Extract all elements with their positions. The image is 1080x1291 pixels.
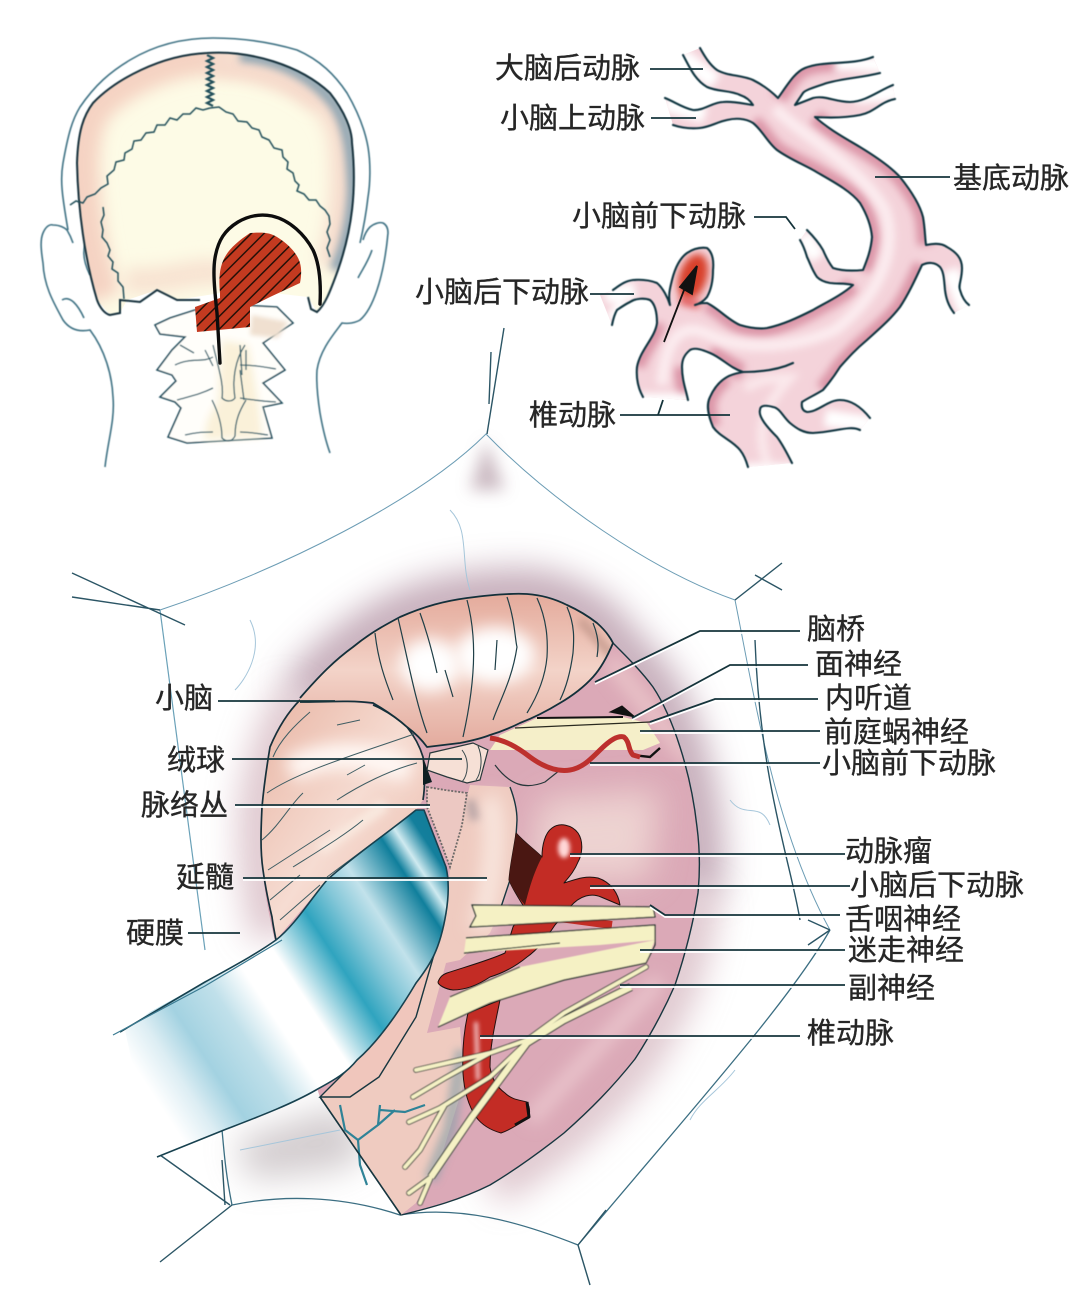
artery outline xyxy=(612,48,969,467)
choroid plexus xyxy=(427,787,467,867)
incision arc xyxy=(214,215,320,363)
artery labels: 大脑后动脉 xyxy=(495,52,640,85)
surgical field labels: left: 小脑 xyxy=(155,682,213,715)
surgical field labels: right: 内听道 xyxy=(825,682,912,715)
anterior inferior cerebellar artery xyxy=(490,737,640,770)
internal acoustic canal and nerve xyxy=(490,706,660,757)
surgical field labels: right: 椎动脉 xyxy=(807,1017,894,1050)
brainstem medulla xyxy=(320,785,517,1215)
artery labels: 椎动脉 xyxy=(529,399,616,432)
surgical field labels: right: 舌咽神经 xyxy=(845,903,961,936)
surgical field labels: right: 小脑后下动脉 xyxy=(850,869,1024,902)
flocculus xyxy=(423,743,488,785)
artery body xyxy=(590,40,980,475)
surgical field xyxy=(72,328,830,1285)
leader lines for surgical field xyxy=(188,631,850,1038)
surgical field labels: right: 副神经 xyxy=(848,972,935,1005)
head outline and ears xyxy=(41,38,388,467)
surgical field labels: right xyxy=(807,613,1024,1050)
blue dural retractor xyxy=(113,810,448,1157)
surgical field labels: right: 小脑前下动脉 xyxy=(822,747,996,780)
artery labels xyxy=(415,52,1069,432)
cranial nerves xyxy=(405,905,655,1203)
label lines for artery diagram xyxy=(590,69,950,415)
retraction sutures xyxy=(72,328,830,1285)
cranial sutures xyxy=(70,55,330,299)
surgical field labels: left: 绒球 xyxy=(167,744,225,777)
surgical field labels: right: 动脉瘤 xyxy=(845,835,932,868)
surgical field labels: left: 脉络丛 xyxy=(141,789,228,822)
arrow in aneurysm xyxy=(664,266,697,342)
skull back view illustration xyxy=(41,38,388,467)
surgical field labels: right: 迷走神经 xyxy=(848,934,964,967)
operative opening xyxy=(261,594,699,1215)
cerebellar folia xyxy=(375,597,598,737)
artery labels: 基底动脉 xyxy=(953,162,1069,195)
surgical field labels: right: 前庭蜗神经 xyxy=(824,716,969,749)
brainstem root and vessel curve xyxy=(495,765,560,786)
dura flaps xyxy=(160,434,830,1245)
cranium xyxy=(77,53,354,315)
posterior inferior cerebellar artery and vertebral artery xyxy=(438,825,620,1133)
surgical field labels: left xyxy=(126,682,234,950)
spine vertebrae xyxy=(155,305,293,443)
dura blood vessels xyxy=(235,510,770,1150)
pons upper lobe xyxy=(300,594,613,747)
cerebellum lower xyxy=(261,700,424,940)
surgical field labels: left: 延髓 xyxy=(176,861,234,894)
artery labels: 小脑后下动脉 xyxy=(415,276,589,309)
artery labels: 小脑上动脉 xyxy=(500,102,645,135)
surgical field labels: left: 硬膜 xyxy=(126,917,184,950)
craniotomy red hatched region xyxy=(195,233,301,332)
surgical field labels: right: 脑桥 xyxy=(807,613,865,646)
veins xyxy=(340,1105,425,1185)
surgical field labels: right: 面神经 xyxy=(815,648,902,681)
cerebellum under drape strip xyxy=(320,913,446,1097)
artery labels: 小脑前下动脉 xyxy=(572,200,746,233)
basilar artery diagram xyxy=(590,40,980,475)
